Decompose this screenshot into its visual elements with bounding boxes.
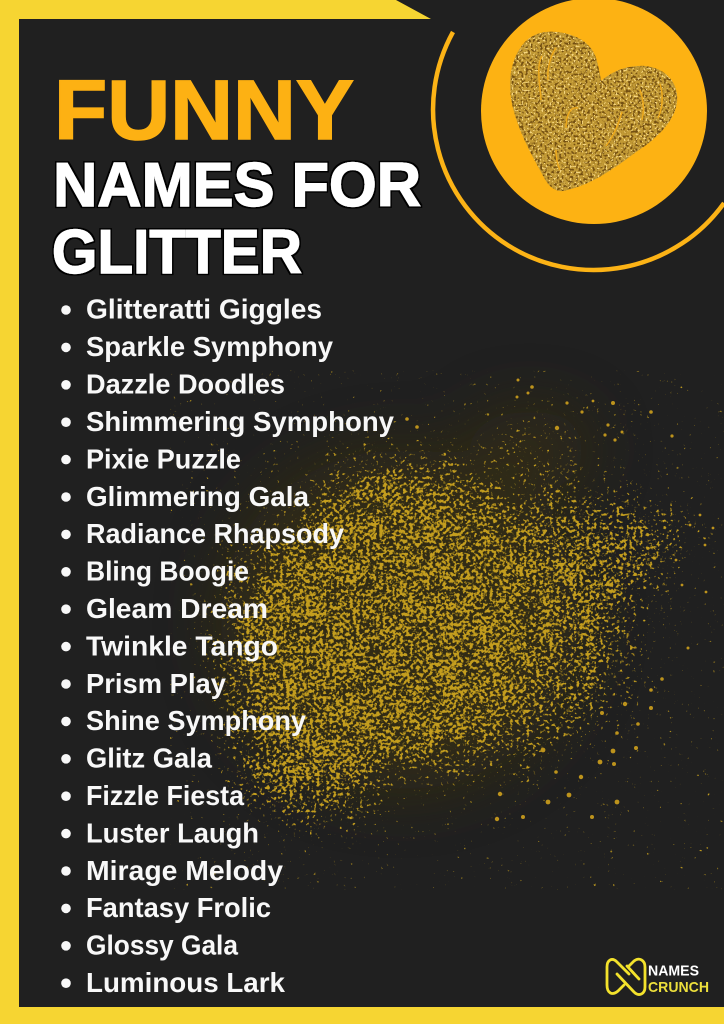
title line: NAMES FOR: NAMES FOR <box>53 151 421 220</box>
list of names: Glossy Gala <box>86 930 238 961</box>
list of names: Sparkle Symphony <box>86 331 333 362</box>
icon: N logo mark <box>607 959 645 994</box>
list of names: Glimmering Gala <box>86 481 309 512</box>
list of names: Fizzle Fiesta <box>86 780 244 811</box>
list of names: Radiance Rhapsody <box>86 518 344 549</box>
list of names: Luster Laugh <box>86 817 259 848</box>
list of names: Fantasy Frolic <box>86 892 271 923</box>
logo word: CRUNCH: CRUNCH <box>648 979 709 996</box>
logo: Names Crunch <box>607 959 709 996</box>
icon: glitter heart <box>510 32 677 191</box>
orange circle <box>481 0 707 224</box>
list of names: Prism Play <box>86 668 226 699</box>
list of names: Shine Symphony <box>86 705 306 736</box>
list of names: Pixie Puzzle <box>86 443 241 474</box>
list of names: Twinkle Tango <box>86 630 278 661</box>
list of names: Mirage Melody <box>86 855 283 886</box>
title <box>52 63 421 287</box>
list of names: Glitz Gala <box>86 743 212 774</box>
title line: FUNNY: FUNNY <box>54 63 354 157</box>
list of names: Shimmering Symphony <box>86 406 394 437</box>
list of names <box>61 294 394 998</box>
list of names: Bling Boogie <box>86 556 249 587</box>
logo word: NAMES: NAMES <box>648 964 699 980</box>
list of names: Gleam Dream <box>86 593 268 624</box>
list of names: Luminous Lark <box>86 967 285 998</box>
glitter splash <box>220 378 714 821</box>
list of names: Glitteratti Giggles <box>86 294 322 324</box>
orange ring arc <box>433 32 724 270</box>
title line: GLITTER: GLITTER <box>52 218 302 287</box>
list of names: Dazzle Doodles <box>86 368 285 400</box>
